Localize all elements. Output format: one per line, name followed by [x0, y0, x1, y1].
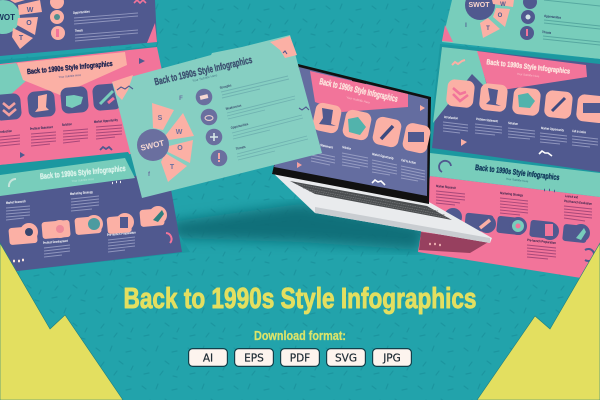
panel: left top SWOT slide: W — [27, 7, 34, 14]
panel: right research slide: Your Subtitle Here — [506, 177, 529, 183]
format buttons — [189, 349, 411, 366]
panel: right research slide: Market Research — [436, 184, 456, 190]
panel: left pink slide: Solution — [62, 122, 72, 127]
panel: left pink slide: Back to 1990s Style Infographics — [27, 59, 113, 76]
panel: left infographic slide: Market Research — [6, 199, 26, 205]
panel: right top SWOT slide: O — [498, 13, 503, 19]
panel: main SWOT slide: Opportunities — [230, 122, 249, 130]
panel: left pink slide: Your Subtitle Here — [58, 73, 82, 79]
panel: right research slide: Marketing Strategy — [500, 191, 523, 197]
format buttons: AI — [203, 352, 213, 364]
laptop: Back to 1990s Style Infographics — [319, 76, 399, 104]
swot wheel: T — [170, 164, 175, 171]
swot wheel: W — [176, 129, 183, 136]
panel: right pink banner slide: Introduction — [444, 115, 458, 120]
corner: yellow right — [477, 243, 600, 400]
swot wheel — [137, 96, 194, 182]
panel: right top SWOT slide — [442, 0, 600, 59]
panel: right research slide: Back to 1990s Style Infographics — [475, 163, 560, 182]
panel: left pink slide: Market Opportunity — [94, 118, 118, 124]
swot wheel: O — [177, 145, 183, 152]
laptop — [272, 64, 492, 243]
pills — [444, 208, 590, 243]
panel: left infographic slide: Product Development — [43, 239, 69, 245]
item labels: Strengths — [219, 83, 232, 90]
panel: left top SWOT slide: O — [26, 20, 32, 27]
panel: main SWOT slide — [112, 35, 322, 198]
laptop shadow on slide — [419, 232, 490, 253]
format buttons: SVG — [335, 352, 357, 364]
swot wheel: SWOT — [140, 138, 165, 153]
pills — [8, 206, 167, 245]
laptop: Call to Action — [401, 158, 416, 165]
panel: left top SWOT slide — [0, 0, 157, 56]
format buttons: JPG — [382, 352, 401, 364]
subtitle: Your Subtitle Here — [192, 73, 218, 83]
laptop: Your Subtitle Here — [346, 95, 371, 105]
panel: right research slide — [418, 153, 600, 281]
panel: right research slide: Pre-launch Preparation — [527, 238, 556, 245]
panel: left infographic slide: Back to 1990s Style Infographics — [40, 164, 126, 181]
panel: right top SWOT slide: Opportunities — [544, 14, 561, 20]
panel: right top SWOT slide: I — [465, 23, 467, 29]
laptop shadow — [170, 204, 425, 250]
panel: right top SWOT slide: SWOT — [468, 2, 490, 9]
panel: right pink banner slide: Problem Statement — [476, 117, 499, 123]
swot wheel: F — [179, 96, 183, 102]
panel: right pink banner slide: Solution — [508, 121, 518, 126]
panel: left pink slide: Problem Statement — [30, 125, 54, 131]
laptop base — [272, 172, 492, 243]
panel: left infographic slide: Marketing Strategy — [70, 190, 93, 196]
panel: right pink banner slide — [428, 44, 600, 178]
swot wheel: f — [148, 172, 151, 178]
panel: right top SWOT slide: W — [500, 2, 506, 8]
panel: left top SWOT slide: Opportunities — [73, 10, 90, 15]
screen tiles — [311, 102, 432, 154]
keyboard — [290, 181, 452, 220]
panel: left infographic slide: Pre-launch Preparation — [107, 230, 136, 237]
corner accents — [112, 75, 133, 100]
icon tiles — [446, 79, 600, 124]
panel: left infographic slide: Your Subtitle Here — [71, 177, 95, 183]
format buttons: EPS — [244, 352, 264, 364]
panel: main SWOT slide: Threats — [235, 145, 246, 151]
panel: main SWOT slide: Weaknesses — [225, 103, 242, 111]
title: Back to 1990s Style Infographics — [124, 283, 476, 315]
panel: left pink slide — [0, 46, 180, 166]
panel: right research slide: Launch and — [565, 194, 578, 199]
screen — [272, 64, 431, 204]
title: Back to 1990s Style Infographics — [153, 55, 254, 88]
swot wheel: S — [158, 115, 163, 122]
icon tiles — [0, 83, 122, 121]
format buttons: PDF — [290, 352, 310, 364]
panel: right pink banner slide: Your Subtitle Here — [517, 72, 540, 78]
laptop: Market Opportunity — [372, 152, 394, 161]
laptop: Statement — [320, 143, 334, 150]
panel: left infographic slide — [0, 152, 190, 273]
panel: right pink banner slide: Call to Action — [572, 129, 586, 134]
subtitle: download format: Download format: — [254, 328, 346, 343]
panel: right pink banner slide: Back to 1990s Style Infographics — [486, 57, 571, 76]
panel: right pink banner slide: Market Opportunity — [541, 126, 564, 132]
icons — [196, 89, 227, 166]
screen notch — [352, 78, 366, 84]
panel: right top SWOT slide: Threats — [542, 30, 551, 35]
laptop: Solution — [342, 145, 351, 151]
panel: right top SWOT slide: T — [486, 26, 490, 32]
panel: left top SWOT slide: T — [19, 35, 24, 42]
corner: yellow left — [0, 243, 123, 400]
panel: left top SWOT slide: Threats — [75, 28, 83, 33]
